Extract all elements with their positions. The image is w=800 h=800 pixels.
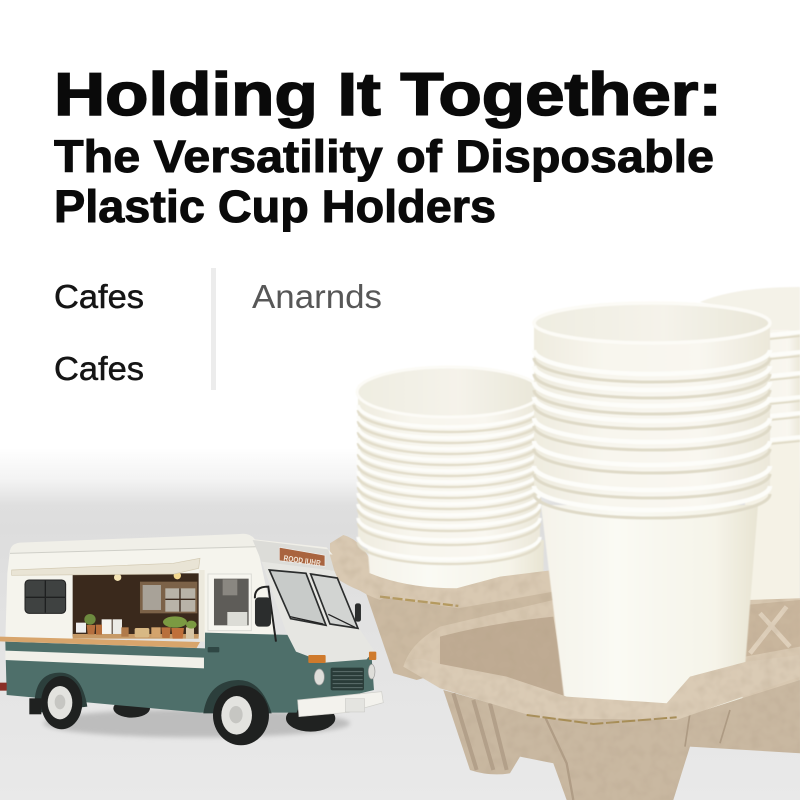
front cup top rim: [534, 303, 770, 343]
serving hatch interior: [73, 570, 205, 642]
title line 2: The Versatility of Disposable: [54, 131, 714, 182]
front pulp tray rear: [403, 598, 800, 723]
front tray front wall: [403, 655, 800, 800]
destination sign: ROOD IUHR: [283, 554, 321, 568]
cab hood: [262, 562, 374, 663]
indicator lights: [308, 652, 376, 663]
left stack rim: [357, 367, 541, 417]
food truck: [0, 534, 383, 745]
door window: [208, 574, 251, 631]
truck box upper: [5, 543, 277, 640]
tray rear section: [403, 598, 800, 723]
awning: [12, 558, 200, 575]
title line 3: Plastic Cup Holders: [54, 181, 496, 232]
front cup body: [541, 505, 758, 712]
left cup stack: [357, 367, 544, 595]
far wheels: [113, 699, 335, 732]
label: cafes 1: Cafes: [54, 278, 144, 315]
label: anarnds: Anarnds: [252, 278, 382, 315]
tray lower body: [443, 680, 800, 800]
ground shadow: [43, 709, 350, 737]
wooden counter: [0, 637, 200, 648]
back pulp tray front rim: [330, 563, 553, 608]
license plate: [345, 699, 365, 712]
side mirrors: [255, 587, 361, 642]
white stripe: [5, 651, 204, 668]
windshield: [269, 570, 358, 628]
door handle: [208, 647, 219, 652]
label: cafes 2: Cafes: [54, 350, 144, 387]
truck green lower body: [5, 633, 374, 713]
title: [54, 61, 722, 232]
front cup stack: [534, 303, 770, 712]
grille: [331, 668, 364, 690]
front bumper: [298, 692, 383, 717]
title line 1: Holding It Together:: [54, 61, 722, 128]
text block: left column labels: [54, 278, 144, 387]
roof: [10, 534, 333, 555]
tray front rim: [403, 655, 800, 720]
back right cup stack: [700, 287, 800, 640]
headlights: [314, 664, 375, 685]
rear wheel: [29, 673, 87, 729]
destination sign: [279, 547, 325, 568]
left box window: [25, 580, 66, 613]
front wheel: [203, 680, 272, 745]
cab top panel: [253, 540, 334, 571]
back pulp tray rear: [330, 535, 557, 680]
counter goods and plants: [76, 614, 197, 639]
rear tail light: [0, 683, 7, 691]
